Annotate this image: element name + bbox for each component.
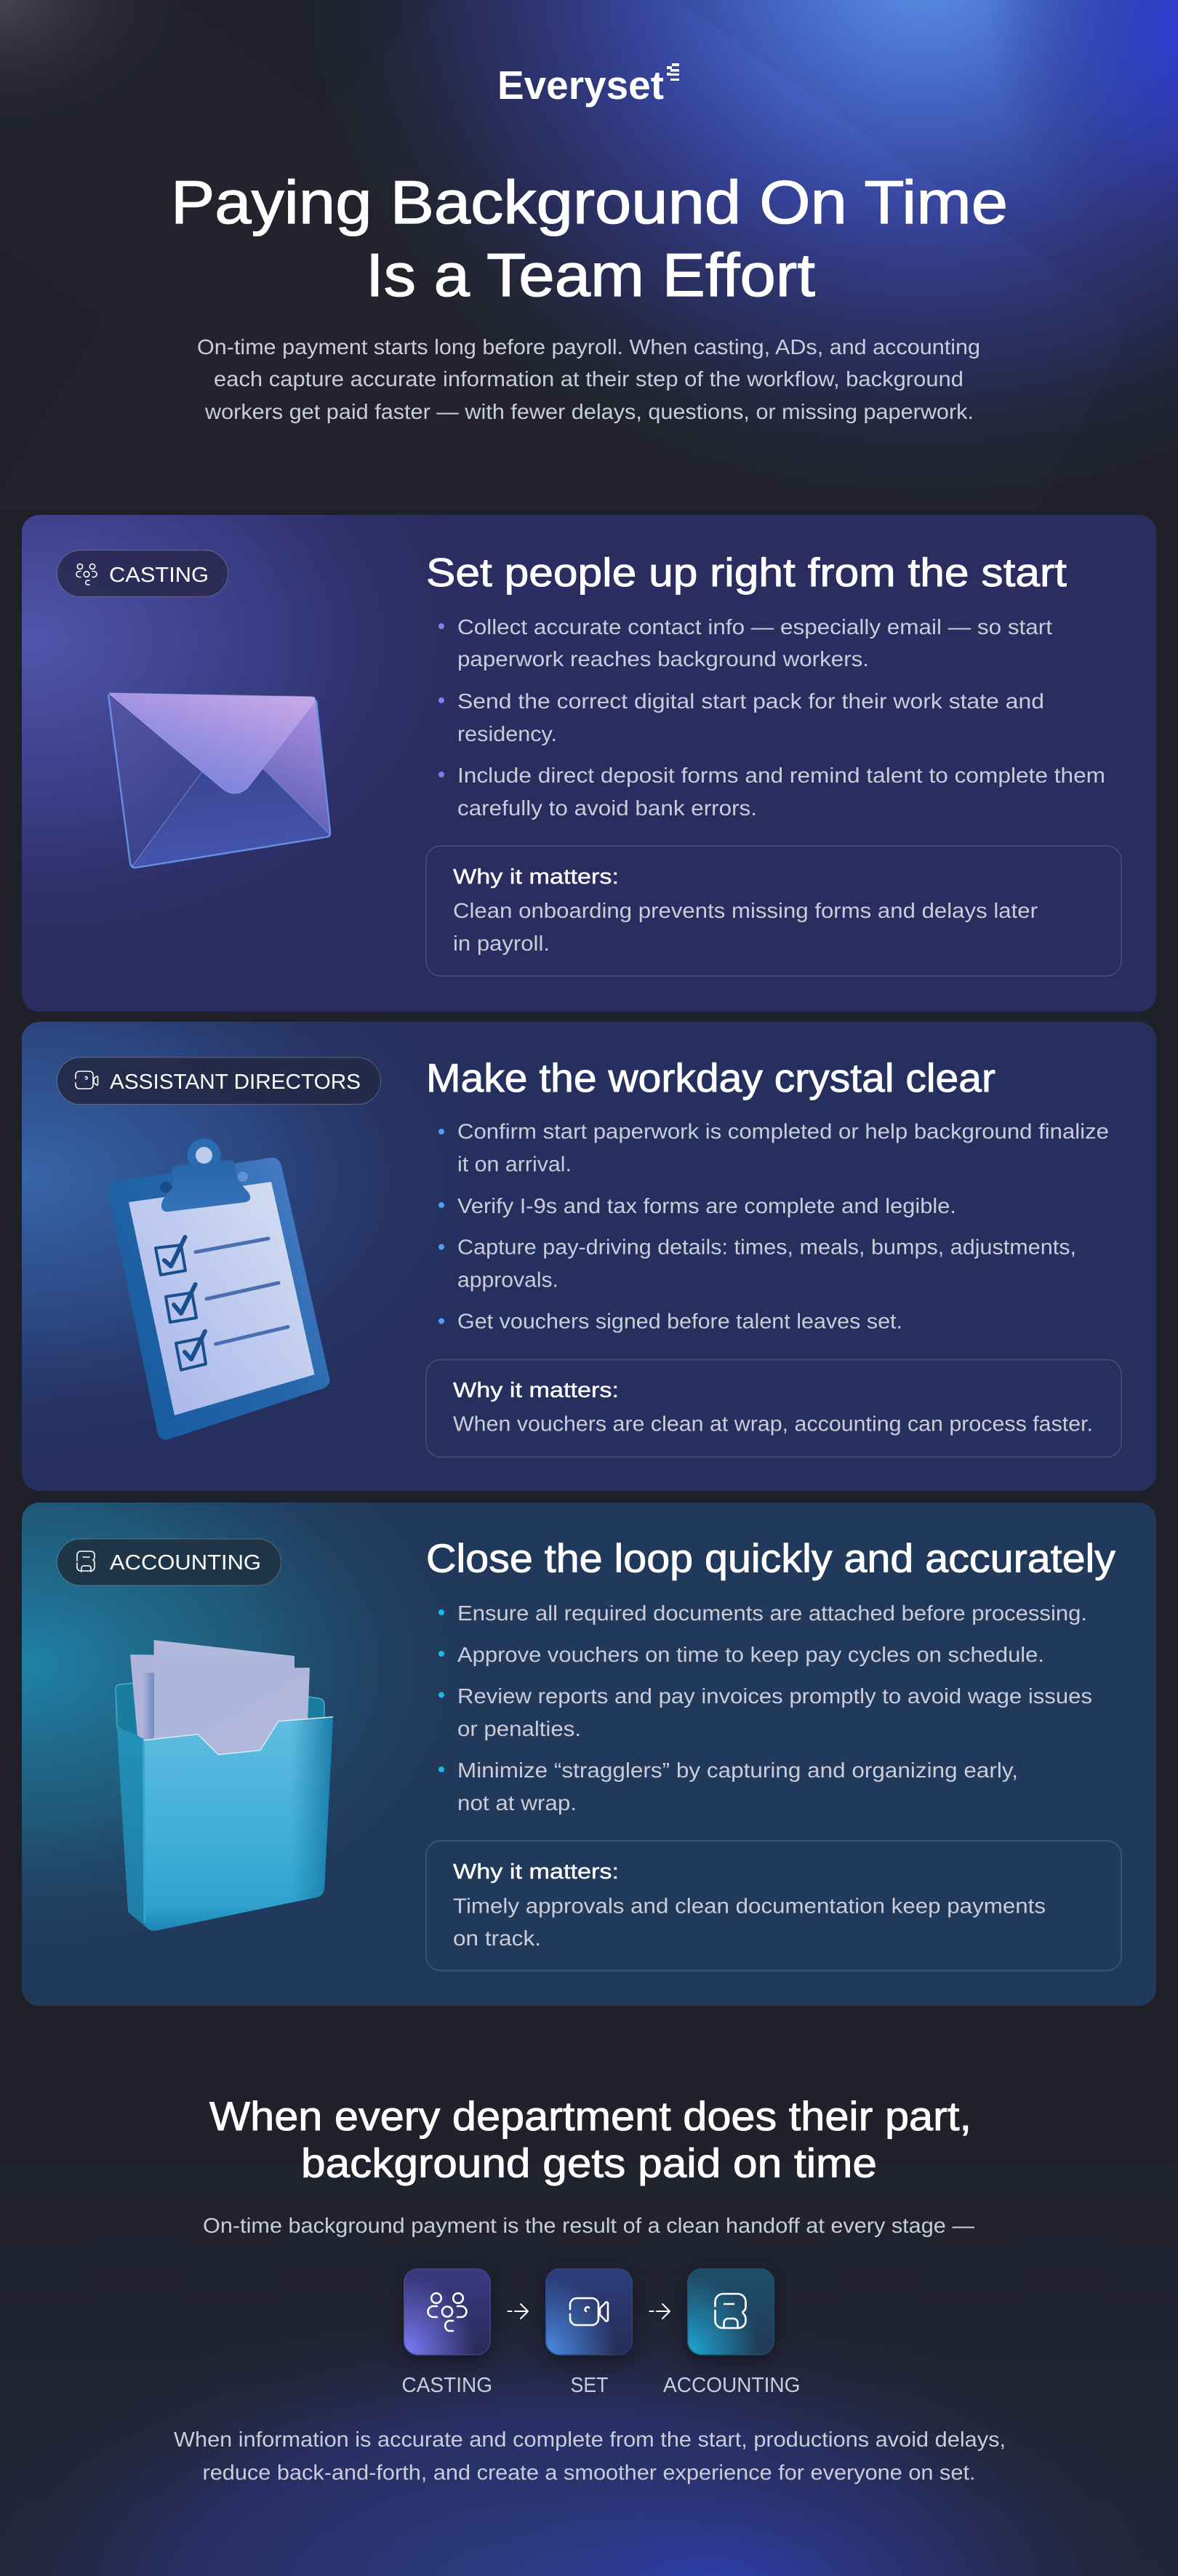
casting pill label [57,550,228,596]
icon: glass envelope [108,693,330,868]
accounting bullet list: Ensure all required documents are attached before processing. [457,1602,1087,1625]
accounting callout: why it matters: on track. [453,1927,541,1951]
intro paragraph: On-time payment starts long before payroll. When casting, ADs, and accounting [197,336,980,359]
casting callout: why it matters: Why it matters: [453,865,619,889]
accounting bullet list: or penalties. [457,1718,581,1741]
casting callout: why it matters: in payroll. [453,932,550,956]
panel: assistant directors [22,1022,1156,1491]
accounting heading: Close the loop quickly and accurately [426,1536,1116,1581]
intro paragraph: workers get paid faster — with fewer delays, questions, or missing paperwork. [204,401,974,424]
label: set: SET [570,2374,609,2397]
assistant directors callout: why it matters: Why it matters: [453,1379,619,1402]
closing heading: background gets paid on time [301,2140,877,2186]
casting callout: why it matters [426,846,1121,976]
accounting bullet list [438,1602,1092,1815]
tile: set icon [545,2268,633,2355]
assistant directors heading: Make the workday crystal clear [426,1055,995,1100]
casting bullet list: Send the correct digital start pack for their work state and [457,690,1044,713]
assistant directors bullet list: Get vouchers signed before talent leaves set. [457,1311,902,1334]
assistant directors bullet list: it on arrival. [457,1153,572,1177]
icon: clipboard with checklist [108,1139,329,1440]
accounting callout: why it matters: Why it matters: [453,1860,619,1884]
intro paragraph [197,336,980,424]
casting bullet list: Include direct deposit forms and remind talent to complete them [457,764,1105,788]
logo: Everyset: Everyset [497,63,664,108]
label: accounting: ACCOUNTING [663,2374,800,2397]
accounting pill label [57,1539,281,1585]
casting bullet list: Collect accurate contact info — especially email — so start [457,616,1052,639]
casting bullet list: paperwork reaches background workers. [457,648,869,671]
assistant directors callout: why it matters [426,1360,1121,1457]
assistant directors bullet list: Verify I-9s and tax forms are complete and legible. [457,1195,956,1218]
panel: casting [22,515,1156,1012]
arrow: casting to set [508,2304,528,2319]
closing paragraph [174,2428,1006,2484]
accounting pill label: ACCOUNTING [110,1551,261,1575]
casting heading: Set people up right from the start [426,550,1067,595]
icon: blue folder with papers [116,1640,333,1931]
label: casting: CASTING [401,2374,492,2397]
assistant directors bullet list: Confirm start paperwork is completed or help background finalize [457,1120,1109,1143]
accounting bullet list: Approve vouchers on time to keep pay cycles on schedule. [457,1644,1044,1667]
panel: accounting [22,1503,1156,2006]
casting bullet list: carefully to avoid bank errors. [457,797,757,820]
accounting callout: why it matters [426,1841,1121,1971]
assistant directors bullet list: Capture pay-driving details: times, meals, bumps, adjustments, [457,1236,1076,1260]
tile: casting icon [404,2268,491,2355]
casting pill label: CASTING [109,564,209,587]
assistant directors bullet list: approvals. [457,1268,558,1292]
title: Is a Team Effort [366,241,815,309]
arrow: set to accounting [650,2304,670,2319]
title [171,168,1008,309]
assistant directors callout: why it matters: When vouchers are clean at wrap, accounting can process faster. [453,1412,1093,1436]
closing paragraph: When information is accurate and complete from the start, productions avoid delays, [174,2428,1006,2452]
closing heading: When every department does their part, [209,2093,971,2139]
assistant directors pill label [57,1057,381,1104]
accounting bullet list: Review reports and pay invoices promptly to avoid wage issues [457,1685,1092,1708]
intro paragraph: each capture accurate information at their step of the workflow, background [214,368,963,391]
assistant directors pill label: ASSISTANT DIRECTORS [110,1071,361,1094]
tile: accounting icon [687,2268,774,2355]
closing lead-in text: On-time background payment is the result of a clean handoff at every stage — [203,2215,974,2238]
casting callout: why it matters: Clean onboarding prevents missing forms and delays later [453,900,1038,923]
accounting bullet list: not at wrap. [457,1792,577,1815]
casting bullet list [438,616,1105,820]
title: Paying Background On Time [171,168,1008,236]
assistant directors bullet list [438,1120,1109,1334]
casting bullet list: residency. [457,723,557,746]
closing heading [209,2093,971,2186]
workflow diagram [401,2268,800,2397]
accounting bullet list: Minimize “stragglers” by capturing and organizing early, [457,1759,1018,1783]
accounting callout: why it matters: Timely approvals and clean documentation keep payments [453,1895,1046,1919]
closing paragraph: reduce back-and-forth, and create a smoother experience for everyone on set. [202,2461,976,2484]
